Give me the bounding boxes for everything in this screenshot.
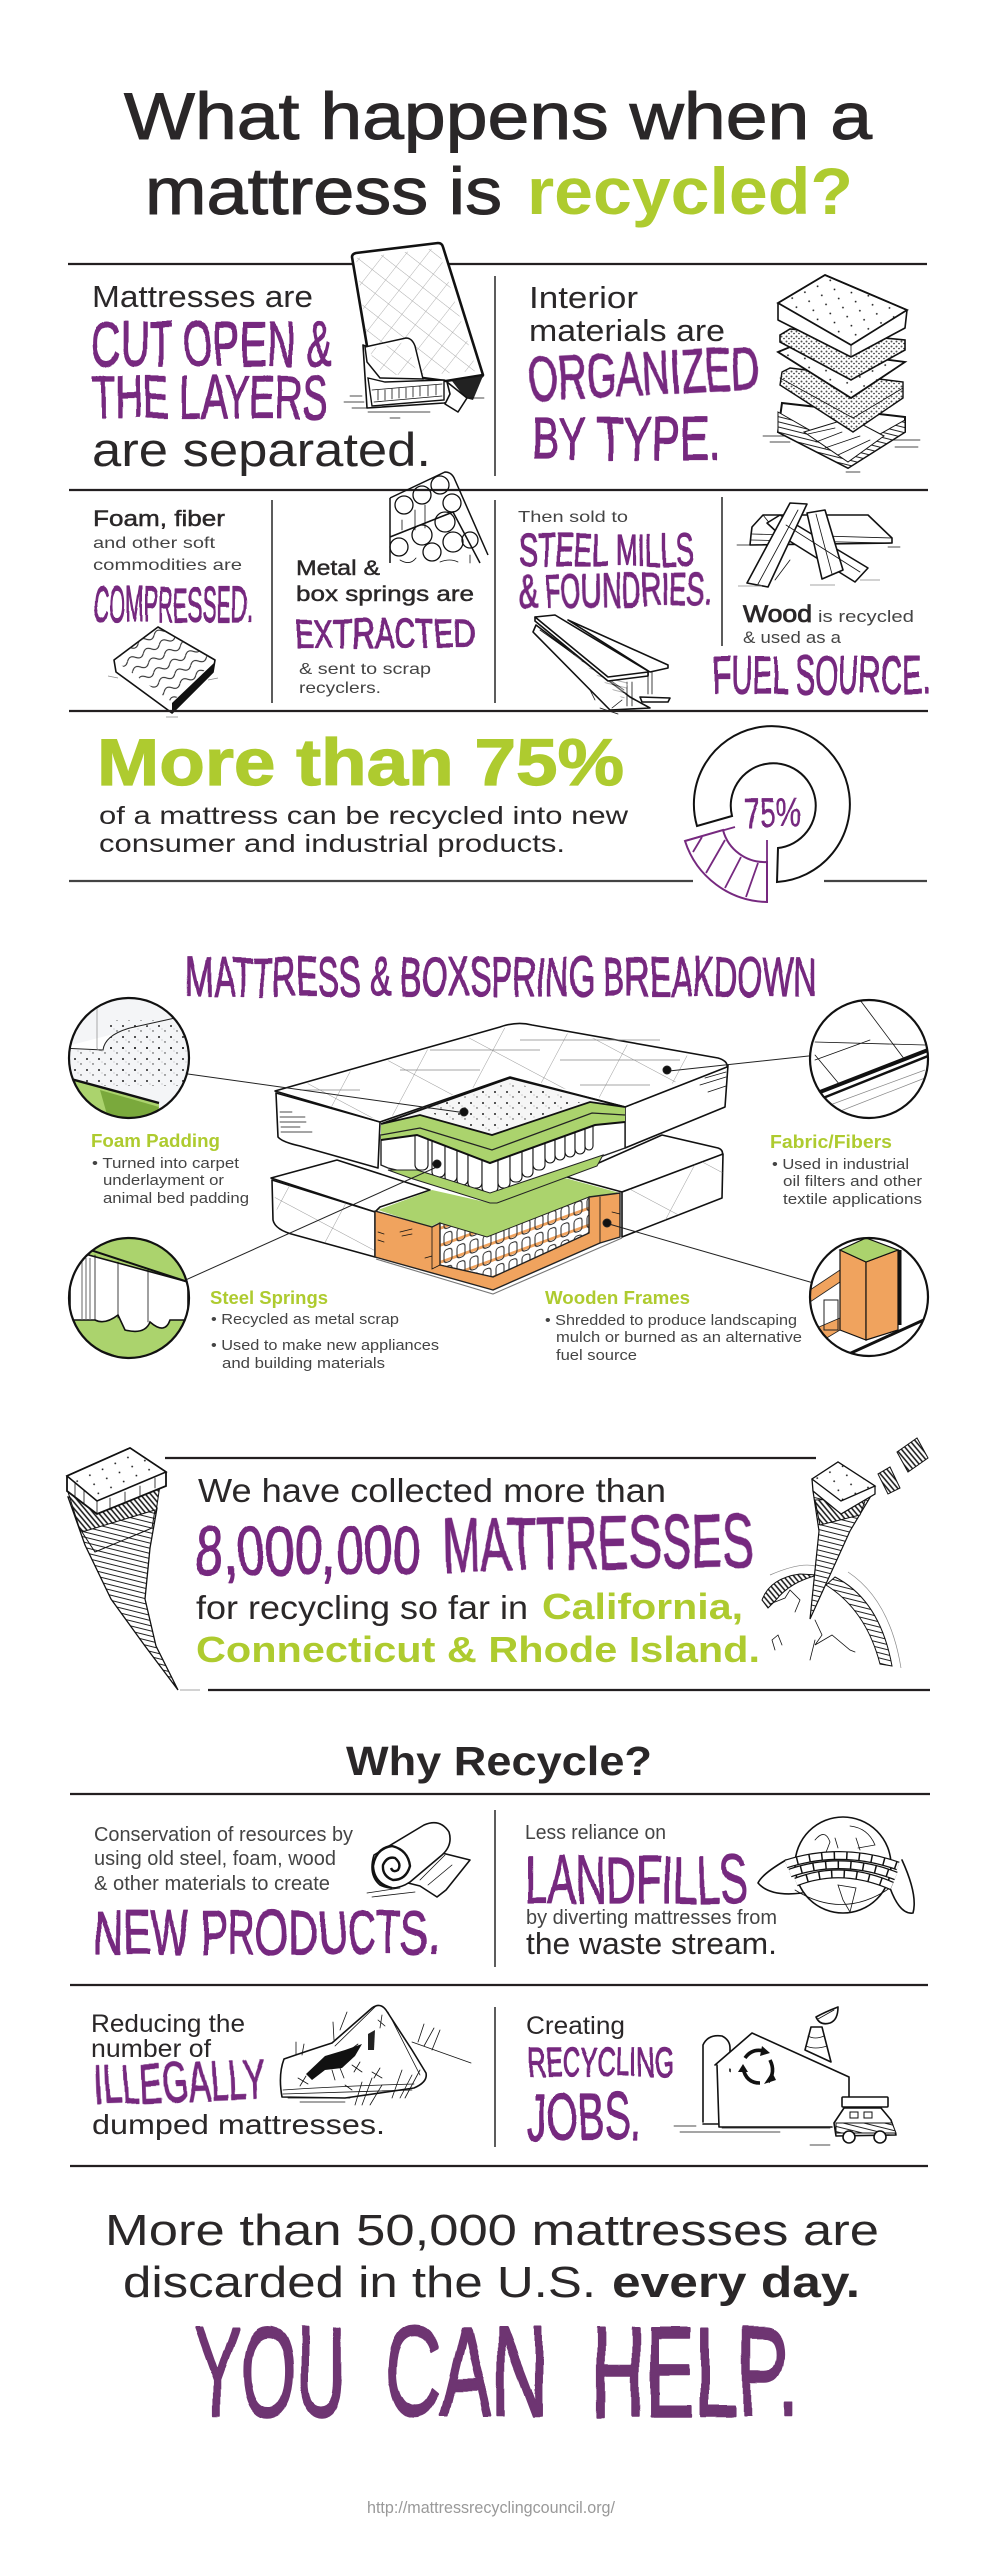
icon: foam detail circle [60, 998, 190, 1125]
chart: 75% pie ring [685, 726, 850, 902]
text: fabric fibers [770, 1132, 922, 1208]
section heading: why recycle: Why Recycle? [346, 1738, 652, 1784]
text: mattresses are cut open: CUT OPEN & [92, 308, 332, 380]
text: fabric fibers: oil filters and other [783, 1174, 922, 1190]
text: reducing illegally dumped: Reducing the [91, 2010, 245, 2038]
text: interior materials organized: materials are [529, 313, 725, 348]
text: more than 75%: More than 75% [97, 725, 624, 799]
text: fabric fibers: textile applications [783, 1192, 922, 1208]
panel: wood fuel [713, 503, 930, 705]
text: conservation of resources: NEW PRODUCTS. [94, 1899, 439, 1968]
text: we have collected 8,000,000: Connecticut & Rhode Island. [196, 1629, 760, 1670]
icon: opened mattress [344, 243, 484, 418]
text: wood fuel source: & used as a [743, 628, 842, 647]
icon: satellite [878, 1438, 928, 1494]
panel: cut open [92, 243, 484, 476]
call to action: you can help: CAN [385, 2301, 548, 2444]
text: conservation of resources: & other materials to create [94, 1873, 330, 1895]
call to action: you can help [194, 2301, 798, 2444]
callout: foam padding [60, 998, 249, 1207]
text: foam padding: Foam Padding [91, 1131, 220, 1151]
text: steel springs: and building materials [222, 1356, 385, 1372]
text: conservation of resources: using old steel, foam, wood [94, 1848, 336, 1870]
top mattress [275, 1023, 728, 1203]
text: wooden frames: • Shredded to produce landscaping [545, 1313, 797, 1329]
icon: fabric detail circle [810, 1000, 928, 1118]
text: metal and box springs extracted: & sent to scrap [299, 661, 431, 678]
text: we have collected 8,000,000: 8,000,000 [195, 1513, 421, 1589]
text: foam fiber compressed: Foam, fiber [93, 506, 225, 531]
text: interior materials organized [525, 280, 761, 474]
icon: recycling factory and truck [674, 2007, 896, 2145]
text: foam padding: underlayment or [103, 1173, 224, 1189]
icon: steel i-beam [533, 615, 670, 714]
icon: globe wearing mattress belt [758, 1817, 914, 1913]
text: foam fiber compressed: commodities are [93, 557, 242, 574]
chart: exploded mattress and boxspring [130, 1023, 855, 1305]
icon: wood frame detail circle [810, 1238, 928, 1358]
text: mattresses are cut open [92, 279, 431, 476]
callout: steel springs [60, 1238, 439, 1372]
text: steel springs: • Used to make new appliances [211, 1338, 439, 1354]
text: foam padding [91, 1131, 249, 1207]
text: foam fiber compressed [93, 506, 253, 633]
panel: organized by type [525, 275, 920, 474]
text: we have collected 8,000,000 [195, 1472, 760, 1670]
source url: http://mattressrecyclingcouncil.org/ [367, 2498, 615, 2517]
text: interior materials organized: BY TYPE. [531, 405, 720, 474]
text: fabric fibers: • Used in industrial [772, 1157, 909, 1173]
text: we have collected 8,000,000: We have collected more than [198, 1472, 666, 1509]
icon: tornado reaching satellite over globe [762, 1438, 928, 1668]
text: we have collected 8,000,000: California, [542, 1586, 743, 1627]
text: interior materials organized: ORGANIZED [525, 334, 761, 415]
text: metal and box springs extracted: EXTRACTED [294, 610, 476, 657]
panel: steel mills [518, 509, 712, 714]
text: reducing illegally dumped: dumped mattresses. [92, 2109, 385, 2140]
text: fabric fibers: Fabric/Fibers [770, 1132, 892, 1152]
text: less reliance on landfills: by diverting mattresses from [526, 1907, 777, 1929]
callout: fabric fibers [770, 1000, 928, 1208]
panel: recycling jobs [526, 2007, 896, 2155]
panel: more than 75 percent [69, 725, 927, 902]
icon: compressed foam block [108, 627, 218, 717]
text: less reliance on landfills: Less reliance on [525, 1822, 666, 1844]
text: more than 75% [97, 725, 629, 858]
closing statement [105, 2206, 879, 2307]
text: metal and box springs extracted [294, 557, 476, 697]
text: more than 75%: of a mattress can be recycled into new [99, 802, 629, 830]
text: foam padding: • Turned into carpet [92, 1156, 239, 1172]
text: wood fuel source: Wood [743, 601, 812, 628]
text: COMPRESSED. [93, 577, 253, 633]
text: less reliance on landfills [525, 1822, 777, 1961]
text: wood fuel source [713, 601, 930, 705]
text: wooden frames: fuel source [556, 1348, 637, 1364]
panel: 8,000,000 mattresses [67, 1438, 928, 1690]
text: wooden frames: mulch or burned as an alternative [556, 1330, 802, 1346]
text: wood fuel source: is recycled [818, 607, 914, 626]
text: metal and box springs extracted: recyclers. [299, 680, 381, 697]
text: reducing illegally dumped [91, 2010, 385, 2140]
callout: wooden frames [545, 1238, 928, 1364]
call to action: you can help: YOU [194, 2301, 346, 2444]
text: mattresses are cut open: THE LAYERS [92, 364, 328, 431]
text: mattresses are cut open: Mattresses are [92, 279, 313, 314]
icon: foam roll [367, 1823, 470, 1897]
icon: dumped mattress with bird [280, 2005, 471, 2105]
closing statement: More than 50,000 mattresses are [105, 2206, 879, 2255]
closing statement: discarded in the U.S. [123, 2258, 596, 2307]
text: more than 75%: consumer and industrial products. [99, 830, 565, 858]
panel: foam compressed [93, 506, 253, 717]
icon: spring detail circle [60, 1238, 189, 1362]
text: we have collected 8,000,000: MATTRESSES [441, 1499, 754, 1589]
text: mattresses are cut open: are separated. [92, 423, 431, 476]
title: mattress is [145, 154, 502, 228]
icon: mattress tornado left [67, 1448, 200, 1690]
title: What happens when a [124, 79, 872, 153]
icon: wood planks [737, 503, 900, 587]
box spring [271, 1135, 723, 1294]
text: less reliance on landfills: the waste stream. [526, 1926, 777, 1961]
text: conservation of resources [94, 1824, 439, 1968]
text: steel springs: • Recycled as metal scrap [211, 1312, 399, 1328]
text: steel mills and foundries: & FOUNDRIES. [518, 563, 712, 618]
panel: illegally dumped [91, 2005, 471, 2140]
text: creating recycling jobs: JOBS. [528, 2079, 641, 2155]
text: metal and box springs extracted: box springs are [296, 583, 474, 606]
panel: landfills [525, 1817, 914, 1961]
call to action: you can help: HELP. [591, 2301, 798, 2444]
text: creating recycling jobs: Creating [526, 2012, 625, 2040]
icon: box spring coils [390, 472, 488, 563]
text: reducing illegally dumped: number of [91, 2035, 211, 2063]
text: we have collected 8,000,000: for recycling so far in [196, 1589, 528, 1626]
text: conservation of resources: Conservation of resources by [94, 1824, 353, 1846]
text: foam fiber compressed: and other soft [93, 535, 216, 552]
closing statement: every day. [612, 2258, 860, 2307]
text: creating recycling jobs [526, 2012, 674, 2155]
leader lines [130, 1051, 855, 1305]
text: metal and box springs extracted: Metal & [296, 557, 380, 580]
text: interior materials organized: Interior [529, 280, 638, 315]
text: steel springs [210, 1288, 439, 1372]
text: reducing illegally dumped: ILLEGALLY [92, 2047, 267, 2116]
text: less reliance on landfills: LANDFILLS [525, 1842, 747, 1918]
panel: new products [94, 1823, 470, 1968]
text: foam padding: animal bed padding [103, 1191, 249, 1207]
title [124, 79, 872, 228]
icon: mattress layers stack [763, 275, 920, 472]
panel: metal extracted [294, 472, 488, 697]
text: steel springs: Steel Springs [210, 1288, 328, 1308]
text: steel mills and foundries: STEEL MILLS [519, 524, 695, 576]
text: steel mills and foundries: Then sold to [518, 509, 628, 526]
text: creating recycling jobs: RECYCLING [528, 2038, 674, 2085]
text: wooden frames [545, 1288, 802, 1364]
label: 75%: 75% [743, 789, 802, 836]
title: recycled? [527, 154, 853, 228]
text: wooden frames: Wooden Frames [545, 1288, 690, 1308]
text: steel mills and foundries [518, 509, 712, 618]
